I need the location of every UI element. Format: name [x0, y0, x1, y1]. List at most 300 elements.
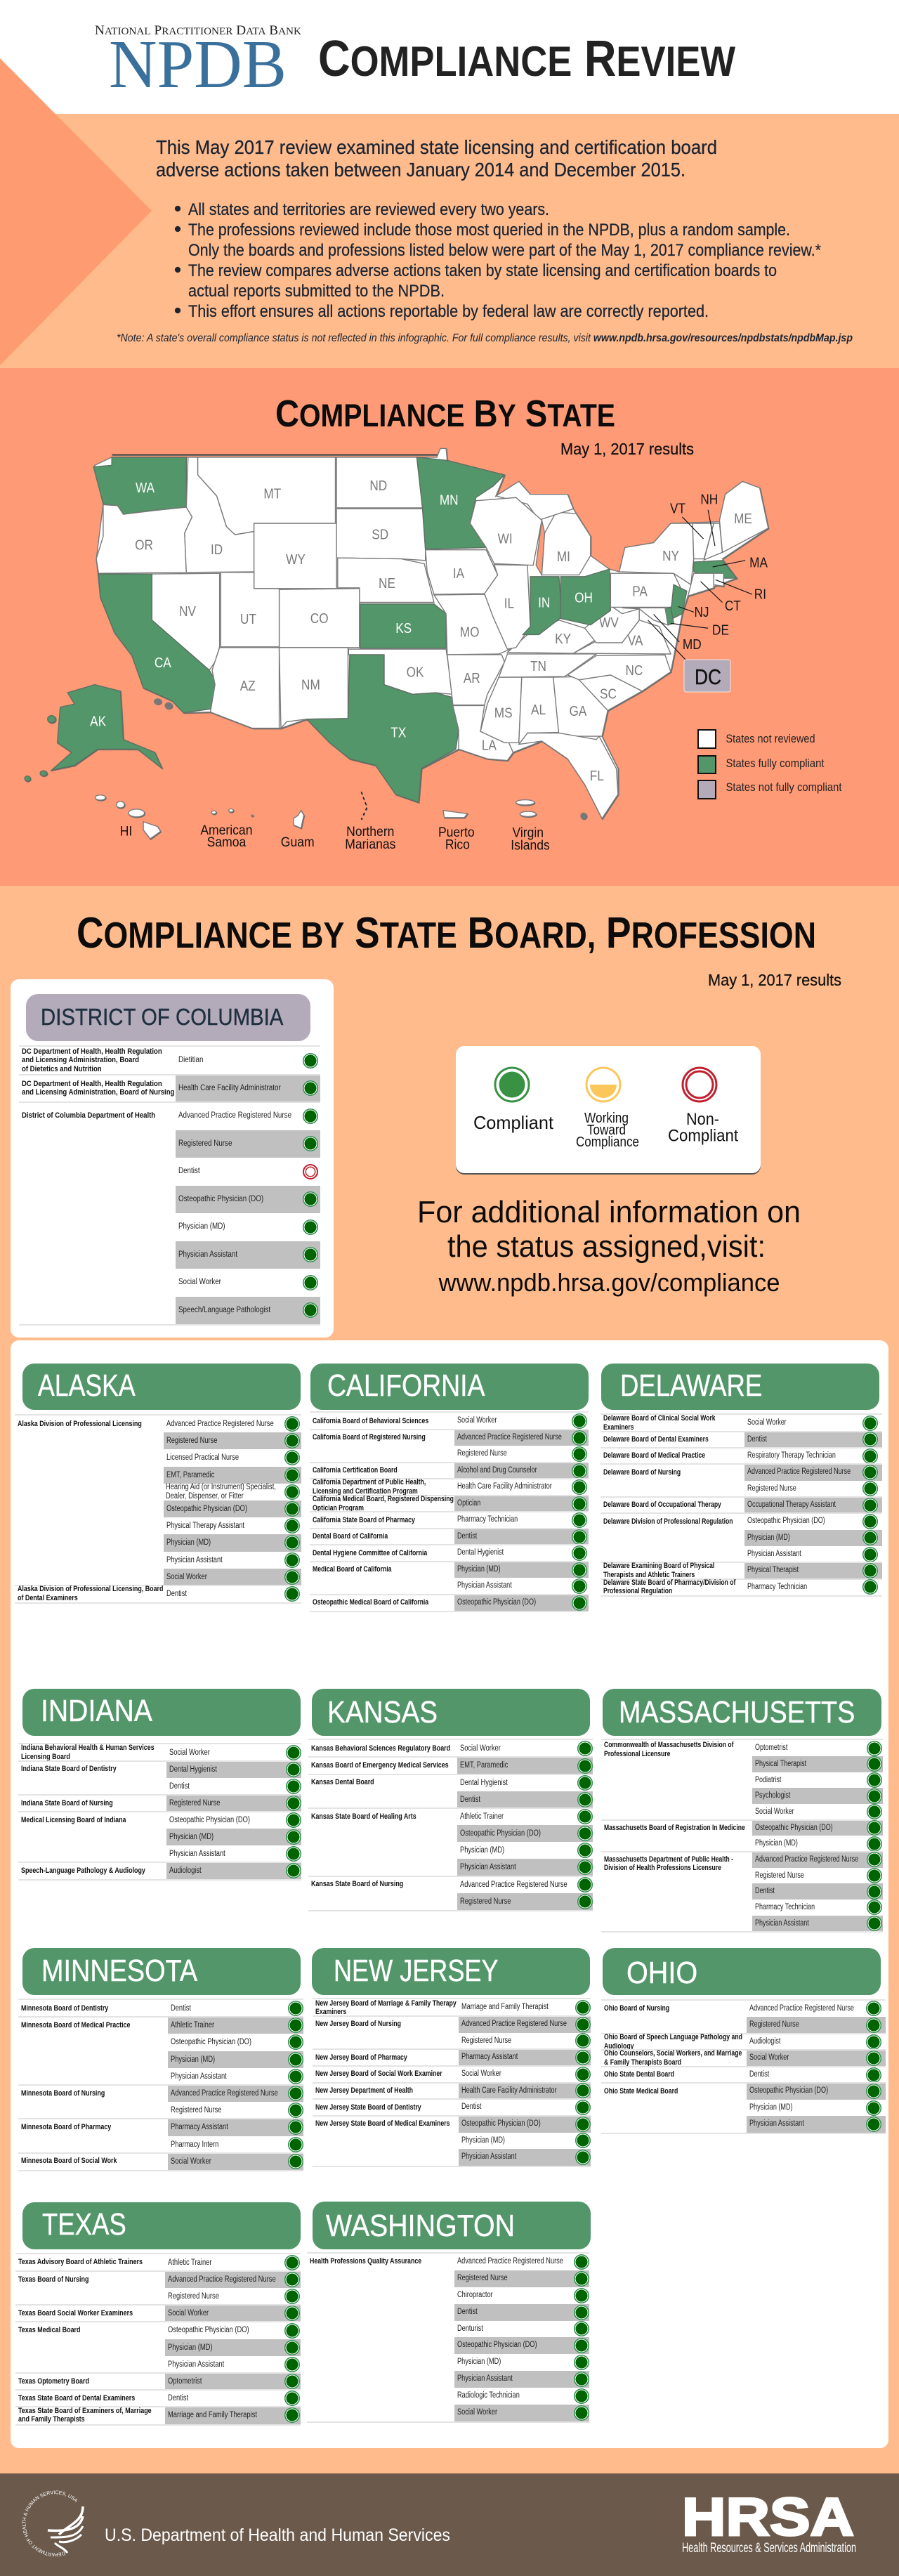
row: Audiologist: Audiologist — [169, 1866, 202, 1875]
state labels: AR — [464, 670, 480, 686]
row: Dentist, non-compliant — [178, 1164, 318, 1179]
row: Physician Assistant: Physician Assistant — [166, 1555, 223, 1564]
row: Pharmacy Technician: California State Board of Pharmacy — [313, 1516, 415, 1524]
row: Physician — [178, 1220, 318, 1235]
row: Dietitian — [22, 1047, 318, 1073]
row: Dentist: Texas State Board of Dental Examiners — [18, 2394, 135, 2402]
row: Registered Nurse — [308, 1893, 593, 1910]
row: Registered Nurse — [755, 1868, 882, 1883]
row: Physician Assistant: Physician Assistant — [457, 2374, 513, 2383]
row: Social Worker: Ohio Counselors, Social Workers, and Marriage — [604, 2049, 742, 2058]
row: Physician: Medical Board of California — [313, 1565, 392, 1574]
row: Advanced Practice Registered Nurse: Alaska Division of Professional Licensing — [18, 1420, 142, 1428]
row: Physician — [313, 2133, 591, 2149]
row: Social Worker — [178, 1275, 318, 1290]
row: Physician Assistant — [747, 1547, 878, 1562]
panel: Ohio — [601, 1948, 886, 2131]
row: Marriage and Family Therapist: New Jersey Board of Marriage & Family Therapy — [315, 1999, 457, 2008]
state labels: KY — [555, 631, 572, 646]
row: Dental Hygienist: Kansas Dental Board — [311, 1778, 374, 1786]
state labels: NH — [700, 491, 718, 507]
row: Health Care Facility Administrator: and Licensing Administration, Board of Nursing — [22, 1088, 174, 1097]
row: Registered Nurse: Registered Nurse — [178, 1139, 232, 1148]
row: Physical Therapist — [601, 1756, 883, 1772]
state labels: TN — [530, 658, 546, 674]
row: Advanced Practice Registered Nurse: Massachusetts Department of Public Health - — [604, 1855, 733, 1864]
DC callout box: DC — [695, 665, 721, 689]
row: EMT, Paramedic: Kansas Board of Emergency Medical Services — [311, 1761, 449, 1770]
row: Osteopathic Physician: Osteopathic Physician (DO) — [457, 2341, 537, 2349]
state labels: NV — [179, 603, 196, 619]
row: Social Worker: Social Worker — [171, 2157, 211, 2166]
row: Physician Assistant — [15, 2356, 301, 2373]
row: Osteopathic Physician: Osteopathic Physician (DO) — [168, 2326, 249, 2334]
row: Dentist: Dentist — [171, 2004, 191, 2013]
row: Psychologist: Psychologist — [755, 1791, 790, 1800]
row: Dietitian: Dietitian — [178, 1056, 203, 1064]
row: Physical Therapy Assistant: Physical Therapy Assistant — [166, 1522, 244, 1530]
row: Dentist: Dentist — [166, 1590, 187, 1598]
row: Physician Assistant — [166, 1552, 300, 1568]
row: Dental Hygienist: Dental Hygiene Committee of California — [313, 1549, 427, 1557]
row: Dentist: New Jersey State Board of Dentistry — [315, 2103, 421, 2112]
label: working toward compliance: Working — [584, 1111, 629, 1126]
row: Registered Nurse — [747, 1481, 878, 1496]
state labels: WA — [136, 480, 155, 495]
row: Registered Nurse: Registered Nurse — [755, 1871, 803, 1880]
state labels: VT — [670, 500, 685, 516]
row: Social Worker: New Jersey Board of Social Work Examiner — [315, 2070, 442, 2078]
status key panel — [456, 1046, 761, 1175]
state labels: AK — [90, 713, 107, 729]
row: Hearing Aid Specialist: Dealer, Dispenser, or Fitter — [166, 1492, 244, 1501]
row: Dentist — [310, 1529, 589, 1545]
state labels: IN — [538, 594, 550, 610]
row: Osteopathic Physician: Osteopathic Physician (DO) — [461, 2119, 541, 2128]
row: Advanced Practice Registered Nurse: Advanced Practice Registered Nurse — [461, 2020, 567, 2028]
map legend: States not fully compliant — [726, 780, 842, 794]
row: Advanced Practice Registered Nurse: Advanced Practice Registered Nurse — [168, 2275, 275, 2284]
row: Dentist: Dentist — [457, 1532, 477, 1541]
row: Physician: Physician (MD) — [460, 1846, 504, 1855]
row: Optometrist — [15, 2373, 301, 2390]
territory labels — [120, 822, 550, 853]
row: Physician: Physician (MD) — [461, 2136, 505, 2145]
territory labels: HI — [120, 823, 132, 839]
row: Dentist — [601, 2067, 886, 2083]
row: Physician — [601, 2100, 886, 2116]
row: Dentist — [307, 2304, 589, 2321]
table: Alaska — [15, 1414, 301, 1604]
heading: Massachusetts: MASSACHUSETTS — [619, 1695, 855, 1730]
state labels: CT — [725, 598, 741, 613]
row: Advanced Practice Registered Nurse — [313, 2016, 591, 2033]
row: Health Care Facility Administrator: Health Care Facility Administrator — [178, 1083, 281, 1092]
row: Dentist — [308, 1791, 593, 1808]
row: Health Care Facility Administrator: Health Care Facility Administrator — [461, 2086, 556, 2095]
map legend — [698, 730, 842, 799]
row: Advanced Practice Registered Nurse — [601, 1852, 883, 1868]
row: Optician: Optician — [457, 1499, 480, 1508]
heading: Ohio — [603, 1948, 881, 1995]
row: Health Care Facility Administrator: California Department of Public Health, — [313, 1478, 426, 1486]
state labels: DE — [712, 622, 729, 638]
bullet list: actual reports submitted to the NPDB. — [188, 282, 445, 301]
row: Physician Assistant: Physician Assistant — [178, 1250, 237, 1259]
row: Health Care Facility Administrator: DC Department of Health, Health Regulation — [22, 1080, 162, 1088]
row: Social Worker — [15, 1569, 301, 1586]
row: Osteopathic Physician — [601, 1820, 883, 1836]
row: Podiatrist: Podiatrist — [755, 1776, 781, 1784]
row: EMT, Paramedic — [308, 1757, 593, 1774]
row: Social Worker — [755, 1804, 882, 1819]
row: Dentist: Delaware Board of Dental Examiners — [603, 1435, 709, 1444]
row: Social Worker: Social Worker — [166, 1573, 207, 1581]
row: Physician Assistant: Physician Assistant — [747, 1550, 801, 1558]
icon: working toward compliance — [586, 1068, 620, 1101]
row: Marriage and Family Therapist — [15, 2407, 301, 2424]
row: Dentist: of Dental Examiners — [18, 1594, 78, 1602]
row: Athletic Trainer: Athletic Trainer — [460, 1812, 504, 1821]
row: Optometrist — [604, 1741, 882, 1758]
row: Osteopathic Physician — [15, 1501, 301, 1517]
state labels: OK — [407, 664, 424, 680]
row: Physician Assistant: Physician Assistant — [168, 2360, 224, 2369]
row: Social Worker — [21, 1744, 301, 1761]
row: Social Worker: Minnesota Board of Social Work — [21, 2157, 117, 2165]
row: Social Worker: Social Worker — [749, 2053, 789, 2062]
HHS seal: DEPARTMENT OF HEALTH & HUMAN SERVICES, USA — [22, 2490, 77, 2557]
row: Pharmacy Technician: Delaware State Board of Pharmacy/Division of — [603, 1578, 735, 1587]
department name: U.S. Department of Health and Human Services — [105, 2525, 450, 2545]
row: Registered Nurse: Registered Nurse — [749, 2020, 799, 2029]
row: Hearing Aid Specialist — [166, 1483, 300, 1501]
row: Physician Assistant — [457, 1578, 587, 1594]
row: Speech/Language Pathologist: Speech/Language Pathologist — [178, 1305, 270, 1314]
label: non-compliant: Compliant — [668, 1127, 738, 1145]
row: Dentist: Dental Board of California — [313, 1532, 388, 1541]
row: Physician — [755, 1836, 882, 1851]
row: Social Worker — [18, 2153, 303, 2170]
row: Physician Assistant — [313, 2149, 591, 2166]
row: Advanced Practice Registered Nurse — [307, 2254, 589, 2270]
row: Registered Nurse — [18, 1795, 301, 1812]
row: Respiratory Therapy Technician — [601, 1448, 882, 1464]
row: EMT, Paramedic — [15, 1467, 301, 1484]
row: Social Worker: Licensing Board — [21, 1753, 70, 1761]
state labels: ME — [734, 511, 752, 526]
heading: Delaware — [601, 1364, 879, 1410]
row: Social Worker: Social Worker — [747, 1418, 787, 1427]
state labels: OH — [575, 589, 593, 606]
intro paragraph: adverse actions taken between January 2014 and December 2015. — [156, 159, 685, 181]
row: Podiatrist — [755, 1772, 882, 1788]
row: Health Care Facility Administrator — [313, 2083, 591, 2099]
row: Registered Nurse — [601, 2017, 886, 2034]
state labels: AZ — [240, 678, 256, 693]
row: Radiologic Technician — [307, 2388, 589, 2405]
row: Registered Nurse: Indiana State Board of Nursing — [21, 1799, 113, 1807]
row: Optometrist: Optometrist — [755, 1744, 787, 1752]
row: Physician: Physician (MD) — [171, 2055, 215, 2064]
row: Physician: Physician (MD) — [166, 1538, 211, 1547]
row: Osteopathic Physician: Osteopathic Physician (DO) — [166, 1505, 247, 1513]
row: Dentist: Dentist — [168, 2394, 188, 2402]
state labels: MI — [557, 549, 570, 564]
row: Osteopathic Physician — [171, 2034, 303, 2050]
results date: May 1, 2017 results — [560, 440, 694, 458]
heading: Massachusetts — [603, 1689, 881, 1736]
row: Osteopathic Physician — [308, 1825, 593, 1842]
heading: Ohio: OHIO — [626, 1956, 697, 1990]
row: Dentist — [15, 2390, 301, 2407]
row: Advanced Practice Registered Nurse: New Jersey Board of Nursing — [315, 2020, 401, 2028]
heading: California — [310, 1364, 589, 1410]
row: Registered Nurse: Registered Nurse — [457, 2274, 508, 2282]
row: Optometrist: Professional Licensure — [604, 1750, 670, 1758]
intro paragraph — [156, 136, 717, 181]
row: Dentist: Dentist — [749, 2070, 769, 2079]
bullet list — [175, 200, 821, 321]
row: Registered Nurse: Registered Nurse — [168, 2292, 219, 2301]
row: Osteopathic Physician: Osteopathic Physician (DO) — [457, 1598, 536, 1607]
row: Athletic Trainer — [308, 1808, 593, 1825]
row: Marriage and Family Therapist: Marriage and Family Therapist — [168, 2411, 257, 2419]
row: Optician: California Medical Board, Registered Dispensing — [313, 1495, 454, 1503]
row: Physician — [18, 2051, 303, 2068]
map legend: States not reviewed — [726, 732, 815, 745]
row: Advanced Practice Registered Nurse: Advanced Practice Registered Nurse — [171, 2089, 278, 2098]
row: Registered Nurse — [313, 2033, 591, 2049]
additional information text: the status assigned,visit: — [447, 1229, 766, 1264]
row: Advanced Practice Registered Nurse: Texas Board of Nursing — [18, 2275, 88, 2284]
row: Athletic Trainer: Athletic Trainer — [171, 2021, 214, 2029]
heading: District of Columbia — [26, 994, 310, 1041]
state labels: MD — [683, 636, 702, 652]
state labels: CA — [155, 655, 171, 670]
row: Advanced Practice Registered Nurse — [18, 1416, 300, 1432]
row: Pharmacy Technician — [310, 1512, 589, 1529]
row: Advanced Practice Registered Nurse — [601, 2001, 886, 2017]
row: Advanced Practice Registered Nurse: California Board of Registered Nursing — [313, 1433, 426, 1441]
panel: California — [310, 1364, 589, 1612]
panel: Washington — [307, 2202, 591, 2420]
row: Dentist — [21, 2001, 303, 2016]
row: Osteopathic Physician — [307, 2337, 589, 2354]
heading: California: CALIFORNIA — [327, 1368, 485, 1403]
row: Marriage and Family Therapist: Texas State Board of Examiners of, Marriage — [18, 2407, 152, 2415]
state labels: TX — [391, 724, 407, 740]
row: Optometrist: Commonwealth of Massachusetts Division of — [604, 1741, 734, 1749]
row: Optician: Optician Program — [313, 1504, 364, 1512]
row: Advanced Practice Registered Nurse: District of Columbia Department of Health — [22, 1111, 155, 1120]
state labels: WV — [599, 615, 619, 630]
bullet list: All states and territories are reviewed every two years. — [188, 200, 549, 219]
table: Delaware — [601, 1413, 882, 1597]
territory labels: Guam — [281, 834, 315, 849]
panel: New Jersey — [312, 1948, 591, 2164]
row: Pharmacy Assistant: New Jersey Board of Pharmacy — [315, 2053, 407, 2062]
row: Registered Nurse — [307, 2270, 589, 2287]
territory labels: Virgin — [513, 825, 544, 840]
row: Social Worker: Social Worker — [457, 2408, 497, 2417]
row: Osteopathic Physician: Osteopathic Physician (DO) — [749, 2086, 828, 2095]
row: Advanced Practice Registered Nurse: Kansas State Board of Nursing — [311, 1880, 403, 1888]
row: Audiologist: Audiologist — [749, 2037, 780, 2046]
row: Marriage and Family Therapist: Marriage and Family Therapist — [461, 2003, 549, 2011]
row: Registered Nurse: Registered Nurse — [171, 2106, 221, 2114]
row: Advanced Practice Registered Nurse: Delaware Board of Nursing — [603, 1468, 681, 1477]
row: Osteopathic Physician — [15, 2322, 301, 2339]
territory labels: Northern — [346, 823, 394, 839]
bullet list: Only the boards and professions listed below were part of the May 1, 2017 compliance review.* — [188, 241, 821, 260]
state labels: GA — [570, 703, 587, 719]
intro paragraph: This May 2017 review examined state licensing and certification board — [156, 136, 717, 158]
state labels: AL — [531, 702, 546, 717]
compliance by state section background — [0, 368, 899, 886]
row: Radiologic Technician: Radiologic Technician — [457, 2391, 520, 2400]
heading: Minnesota: MINNESOTA — [41, 1954, 197, 1988]
bullet list: The review compares adverse actions taken by state licensing and certification boards to — [188, 261, 777, 280]
heading: Kansas — [312, 1689, 590, 1736]
row: Dental Hygienist: Dental Hygienist — [457, 1548, 504, 1557]
row: Advanced Practice Registered Nurse: Advanced Practice Registered Nurse — [749, 2004, 854, 2013]
row: Hearing Aid Specialist: Hearing Aid (or Instrument) Specialist, — [166, 1483, 276, 1491]
row: Denturist — [307, 2321, 589, 2337]
row: Social Worker — [603, 1414, 878, 1432]
state labels — [90, 478, 768, 783]
state labels: NY — [662, 548, 679, 563]
state labels: NE — [379, 575, 395, 591]
DC callout box — [684, 660, 730, 692]
heading: compliance by state board, profession: COMPLIANCE BY STATE BOARD, PROFESSION — [77, 909, 816, 957]
row: Social Worker — [307, 2405, 589, 2421]
row: Occupational Therapy Assistant: Delaware Board of Occupational Therapy — [603, 1501, 721, 1509]
row: Physical Therapist: Physical Therapist — [755, 1760, 806, 1768]
row: Physician: Physician (MD) — [168, 2343, 212, 2352]
label: non-compliant — [668, 1110, 738, 1145]
row: Social Worker — [313, 2066, 591, 2083]
territory labels: Rico — [445, 837, 470, 852]
row: Osteopathic Physician: Osteopathic Medical Board of California — [313, 1598, 428, 1607]
heading: Washington: WASHINGTON — [326, 2209, 515, 2243]
state labels: NJ — [694, 604, 709, 620]
row: Health Care Facility Administrator: Health Care Facility Administrator — [457, 1482, 552, 1491]
row: Social Worker: Delaware Board of Clinical Social Work — [603, 1414, 716, 1423]
row: Optometrist: Optometrist — [168, 2377, 202, 2386]
row: Physician: Physician (MD) — [755, 1839, 798, 1848]
row: Advanced Practice Registered Nurse — [15, 2271, 301, 2288]
panel: Kansas — [308, 1689, 593, 1911]
row: Dietitian: of Dietetics and Nutrition — [22, 1065, 102, 1073]
label: working toward compliance: Compliance — [576, 1135, 639, 1150]
territory labels: Puerto — [438, 824, 475, 839]
row: Advanced Practice Registered Nurse: Advanced Practice Registered Nurse — [460, 1881, 567, 1889]
row: Pharmacy Technician — [601, 1579, 882, 1595]
row: Advanced Practice Registered Nurse: Advanced Practice Registered Nurse — [457, 1433, 562, 1441]
state labels: IA — [453, 565, 465, 581]
row: Social Worker: Kansas Behavioral Sciences Regulatory Board — [311, 1744, 450, 1753]
row: Osteopathic Physician: Osteopathic Physician (DO) — [171, 2038, 251, 2046]
table: Kansas — [308, 1739, 593, 1911]
row: Pharmacy Technician: Pharmacy Technician — [747, 1583, 807, 1591]
row: Social Worker: Social Worker — [178, 1278, 221, 1286]
row: Health Care Facility Administrator: Licensing and Certification Program — [313, 1487, 418, 1496]
row: Advanced Practice Registered Nurse — [19, 1102, 320, 1130]
row: Physical Therapist: Therapists and Athletic Trainers — [603, 1571, 695, 1579]
row: Dentist, non-compliant: Dentist — [178, 1167, 200, 1175]
heading: Indiana — [22, 1689, 301, 1736]
heading: Texas — [22, 2202, 301, 2249]
state labels: RI — [754, 586, 766, 602]
row: Optician — [310, 1496, 589, 1512]
row: Physician Assistant — [171, 2069, 303, 2084]
row: Respiratory Therapy Technician: Respiratory Therapy Technician — [747, 1451, 836, 1460]
row: Dentist: Dentist — [747, 1435, 767, 1444]
row: Dentist: Dentist — [169, 1782, 190, 1791]
row: Physician: Physician (MD) — [749, 2103, 792, 2112]
row: Athletic Trainer — [15, 2254, 301, 2271]
row: Occupational Therapy Assistant — [601, 1497, 882, 1513]
state labels: ND — [369, 478, 387, 493]
row: Advanced Practice Registered Nurse — [18, 2085, 303, 2102]
row: Advanced Practice Registered Nurse: Advanced Practice Registered Nurse — [747, 1467, 851, 1476]
row: Dental Hygienist: Dental Hygienist — [460, 1779, 508, 1787]
row: Registered Nurse: Registered Nurse — [460, 1897, 511, 1906]
row: Osteopathic Physician: New Jersey State Board of Medical Examiners — [315, 2119, 450, 2128]
state labels: OR — [135, 537, 153, 553]
state labels: NM — [301, 676, 320, 693]
row: Physician: Physician (MD) — [169, 1833, 214, 1841]
NPDB logo: NPDB — [109, 27, 287, 102]
row: Licensed Practical Nurse — [166, 1450, 300, 1465]
row: Denturist: Denturist — [457, 2324, 483, 2332]
additional information text: www.npdb.hrsa.gov/compliance — [438, 1268, 780, 1297]
row: Audiologist — [18, 1862, 301, 1879]
map shapes — [25, 448, 768, 839]
row: Pharmacy Technician: Pharmacy Technician — [755, 1903, 815, 1911]
heading: Alaska: ALASKA — [38, 1368, 136, 1403]
row: Physician Assistant: Physician Assistant — [457, 1581, 512, 1590]
heading: compliance by state: COMPLIANCE BY STATE — [275, 393, 615, 435]
row: Dentist — [601, 1883, 883, 1900]
heading: Kansas: KANSAS — [327, 1695, 438, 1730]
row: Pharmacy Technician — [755, 1900, 882, 1915]
intro section background — [0, 114, 899, 368]
row: Social Worker: Texas Board Social Worker Examiners — [18, 2309, 133, 2317]
state labels: MS — [494, 705, 513, 721]
row: Registered Nurse: Registered Nurse — [747, 1484, 796, 1493]
state labels: IL — [504, 595, 514, 611]
state labels: MT — [263, 485, 281, 502]
row: Osteopathic Physician — [601, 1513, 882, 1530]
leader lines for small states — [648, 510, 752, 660]
row: Health Care Facility Administrator — [19, 1075, 320, 1102]
row: Advanced Practice Registered Nurse: Health Professions Quality Assurance — [310, 2257, 421, 2266]
panel: District of Columbia — [19, 994, 320, 1326]
row: Audiologist: Ohio Board of Speech Language Pathology and — [604, 2033, 742, 2041]
icon: compliant — [495, 1068, 529, 1101]
row: Occupational Therapy Assistant: Occupational Therapy Assistant — [747, 1501, 836, 1509]
row: Chiropractor — [307, 2287, 589, 2304]
row: Physician: Physician (MD) — [178, 1222, 225, 1231]
table: Ohio — [601, 1999, 886, 2134]
row: Physical Therapy Assistant — [166, 1518, 300, 1534]
heading: New Jersey — [312, 1948, 590, 1995]
row: Pharmacy Intern — [171, 2137, 303, 2152]
row: Physician Assistant: Physician Assistant — [169, 1850, 225, 1858]
additional information text — [417, 1195, 801, 1297]
